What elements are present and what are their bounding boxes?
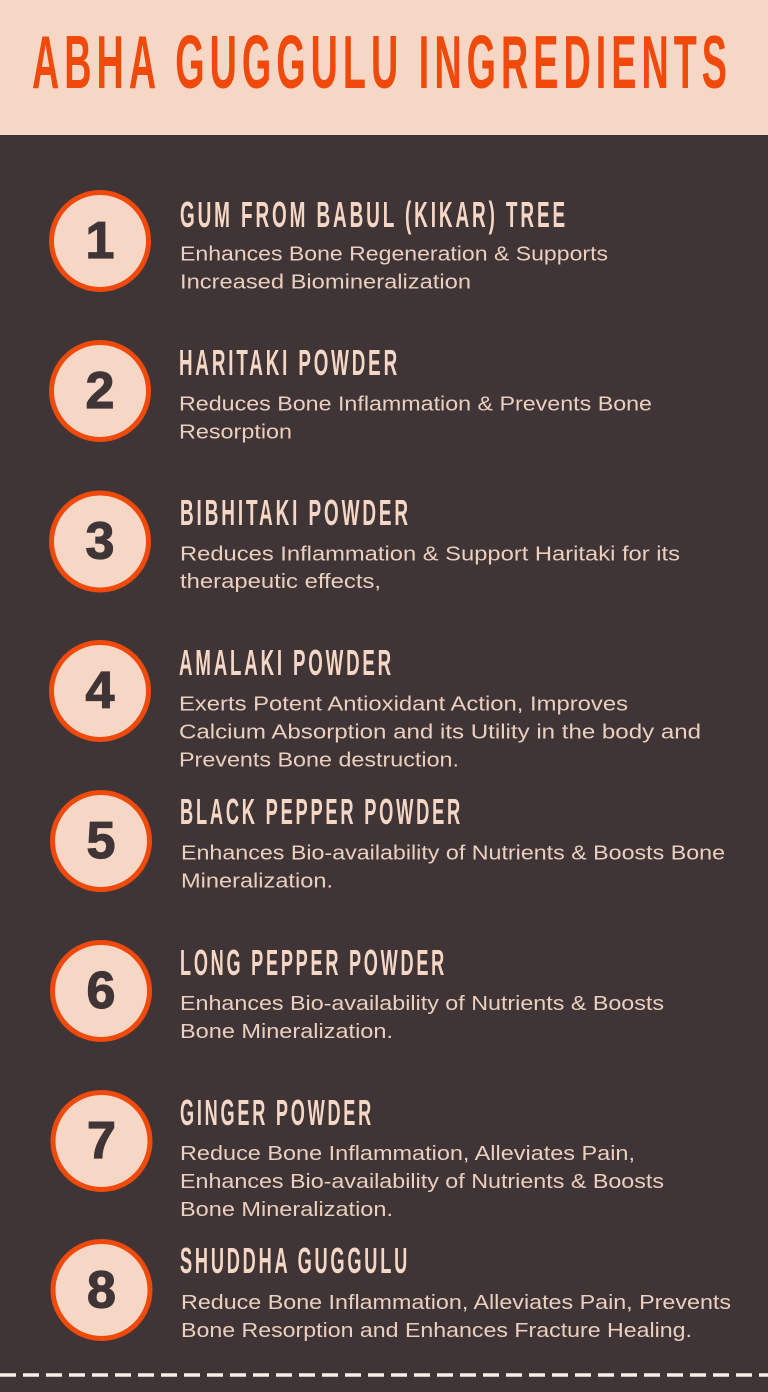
description 2	[179, 392, 652, 444]
number badge 7	[53, 1092, 150, 1190]
number badge 5	[52, 792, 150, 890]
number badge 2	[52, 342, 148, 440]
heading 2: HARITAKI POWDER	[179, 342, 400, 383]
heading 3: BIBHITAKI POWDER	[180, 492, 411, 533]
description 3: Reduces Inflammation & Support Haritaki for its	[180, 542, 680, 566]
number badge 1: 1	[86, 212, 114, 270]
number badge 2: 2	[86, 362, 114, 420]
description 6: Bone Mineralization.	[180, 1020, 393, 1043]
number badge 1	[52, 192, 148, 290]
description 3	[180, 542, 680, 593]
number badge 8	[53, 1242, 150, 1338]
description 8: Bone Resorption and Enhances Fracture Healing.	[181, 1319, 692, 1342]
number badge 6	[52, 942, 150, 1040]
description 7: Bone Mineralization.	[180, 1198, 393, 1221]
description 5: Enhances Bio-availability of Nutrients & Boosts Bone	[181, 842, 725, 864]
header band	[0, 0, 768, 135]
ingredient 8	[53, 1240, 731, 1342]
ingredient 1	[52, 192, 608, 294]
number badge 7: 7	[87, 1112, 116, 1170]
ingredient 3	[52, 492, 680, 593]
description 5: Mineralization.	[181, 870, 333, 892]
heading 4: AMALAKI POWDER	[179, 642, 394, 683]
number badge 3: 3	[86, 512, 114, 570]
ingredient 2	[52, 342, 652, 444]
description 8	[181, 1291, 731, 1342]
number badge 4: 4	[86, 662, 115, 720]
description 6: Enhances Bio-availability of Nutrients & Boosts	[180, 992, 664, 1015]
description 7: Enhances Bio-availability of Nutrients & Boosts	[180, 1170, 664, 1193]
number badge 6: 6	[87, 962, 115, 1020]
description 2: Reduces Bone Inflammation & Prevents Bone	[179, 392, 652, 416]
heading 5: BLACK PEPPER POWDER	[180, 791, 463, 832]
number badge 5: 5	[87, 812, 115, 870]
heading 7: GINGER POWDER	[180, 1092, 374, 1133]
description 4: Exerts Potent Antioxidant Action, Improves	[179, 692, 628, 716]
number badge 3	[52, 493, 148, 590]
description 8: Reduce Bone Inflammation, Alleviates Pain, Prevents	[181, 1291, 731, 1314]
ingredient 6	[52, 942, 664, 1043]
heading 6: LONG PEPPER POWDER	[180, 942, 447, 983]
ingredient 5	[52, 791, 725, 892]
heading 8: SHUDDHA GUGGULU	[180, 1240, 410, 1281]
description 1: Increased Biomineralization	[180, 270, 471, 294]
description 6	[180, 992, 664, 1043]
description 7	[180, 1142, 664, 1221]
description 4: Prevents Bone destruction.	[179, 748, 459, 772]
description 2: Resorption	[179, 420, 292, 444]
description 7: Reduce Bone Inflammation, Alleviates Pain,	[180, 1142, 635, 1165]
description 1	[180, 242, 608, 294]
description 1: Enhances Bone Regeneration & Supports	[180, 242, 608, 266]
number badge 4	[52, 642, 148, 740]
description 3: therapeutic effects,	[180, 570, 381, 593]
description 5	[181, 842, 725, 892]
ingredient 4	[52, 642, 701, 772]
number badge 8: 8	[87, 1262, 116, 1320]
description 4	[179, 692, 701, 772]
description 4: Calcium Absorption and its Utility in the body and	[179, 720, 701, 744]
ingredient 7	[53, 1092, 664, 1221]
